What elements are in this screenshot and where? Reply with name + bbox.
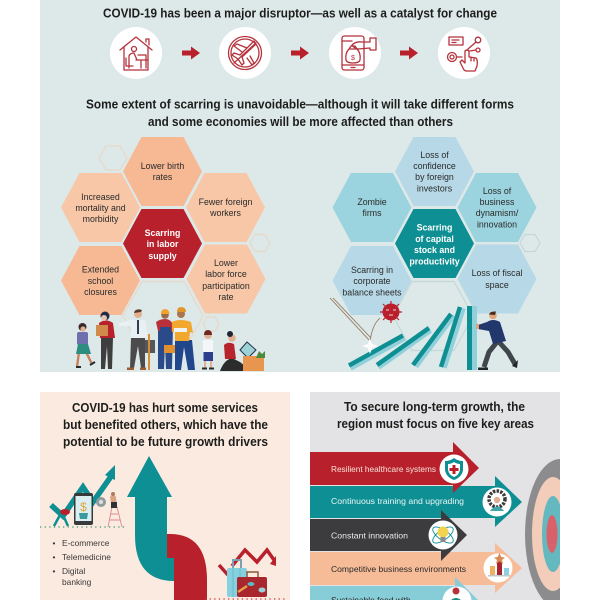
- figure: man pushing domino: [476, 311, 518, 370]
- figure: office worker: [119, 309, 155, 370]
- hexagon: scarring in labor supply: supply: [148, 251, 177, 261]
- hexagon: loss of confidence: Loss of: [420, 150, 449, 160]
- hexagon: scarring of capital stock: [395, 209, 474, 278]
- figure: seated woman with belongings: [220, 331, 265, 371]
- figure: construction worker: [172, 307, 195, 370]
- hexagon: lower birth rates: rates: [153, 172, 173, 182]
- illustration: travel decline: [205, 550, 285, 599]
- heading: services: potential to be future growth drivers: [63, 435, 268, 449]
- hexagon cluster: scarring in labor supply: [61, 137, 270, 350]
- list: growth services: Telemedicine: [62, 552, 111, 562]
- hexagon: lower birth rates: Lower birth: [141, 161, 184, 171]
- hexagon: loss of confidence: [395, 137, 474, 206]
- heading: services: COVID-19 has hurt some services: [72, 401, 258, 415]
- hexagon: lower participation: labor force: [205, 269, 247, 279]
- hexagon: loss of confidence: confidence: [413, 161, 456, 171]
- figure: girl: [76, 323, 95, 367]
- arrow: competitive environments: [310, 543, 522, 593]
- arrow: continuous training: [310, 476, 522, 527]
- arrow: red falling: [167, 534, 207, 600]
- hexagon: loss of fiscal space: [458, 244, 536, 314]
- icon: digital payment: $: [351, 55, 355, 62]
- list: growth services: [52, 538, 111, 587]
- hexagon: scarring in labor supply: in labor: [147, 239, 179, 249]
- hexagon: loss of dynamism: [458, 173, 536, 242]
- hexagon cluster: scarring of capital: [332, 137, 540, 350]
- hexagon: fewer foreign workers: workers: [209, 208, 241, 218]
- list: growth services: •: [52, 538, 56, 548]
- hexagon: scarring of capital stock: stock and: [414, 245, 455, 255]
- illustration: group of workers: [76, 307, 265, 371]
- heading: services: but benefited others, which have the: [63, 418, 268, 432]
- hexagon: zombie firms: Zombie: [357, 197, 387, 207]
- hexagon: extended school closures: closures: [84, 287, 117, 297]
- hexagon: lower participation: Lower: [214, 258, 238, 268]
- hexagon: increased mortality: Increased: [81, 192, 120, 202]
- heading: scarring is unavoidable: and some economies will be more affected than others: [148, 115, 453, 129]
- hexagon: increased mortality: mortality and: [75, 203, 126, 213]
- hexagon: scarring in corporate balance sheets: Scarring in: [351, 265, 393, 275]
- hexagon: increased mortality: [61, 173, 140, 242]
- arrow: competitive environments: Competitive business environments: [331, 564, 466, 574]
- hexagon: loss of fiscal space: Loss of fiscal: [472, 268, 522, 278]
- list: growth services: E-commerce: [62, 538, 110, 548]
- arrow: resilient healthcare: Resilient healthcare systems: [331, 464, 436, 474]
- hexagon: loss of dynamism: Loss of: [483, 186, 512, 196]
- list: growth services: Digital: [62, 566, 85, 576]
- icon: virus: [380, 301, 402, 323]
- panel: scarring overview: [40, 0, 560, 372]
- hexagon: fewer foreign workers: [186, 173, 265, 242]
- heading: services: [63, 401, 268, 449]
- hexagon: loss of dynamism: innovation: [477, 220, 517, 230]
- icon: target: [525, 455, 600, 600]
- arrow: step two: [291, 46, 309, 60]
- arrow: resilient healthcare: [310, 442, 479, 493]
- heading: scarring is unavoidable: Some extent of scarring is unavoidable—although it will take different forms: [86, 98, 514, 112]
- heading: scarring is unavoidable: [86, 98, 514, 129]
- illustration: digital growth: [40, 465, 125, 527]
- arrow: constant innovation: Constant innovation: [331, 530, 408, 540]
- panel: hurt and benefited services: [40, 392, 290, 600]
- hexagon: extended school closures: [61, 246, 140, 315]
- hexagon: lower birth rates: [123, 137, 202, 206]
- hexagon: loss of dynamism: business: [480, 197, 515, 207]
- arrow: sustainable food: [310, 577, 480, 600]
- arrow: step three: [400, 46, 418, 60]
- hexagon: scarring in corporate balance sheets: [332, 246, 412, 315]
- arrow: step one: [182, 46, 200, 60]
- heading: long-term growth: To secure long-term growth, the: [344, 400, 525, 414]
- icon: working from home: [110, 27, 162, 79]
- hexagon: loss of dynamism: dynamism/: [476, 208, 519, 218]
- icon: no air travel: [219, 27, 271, 79]
- arrow: continuous training: Continuous training and upgrading: [331, 496, 464, 506]
- arrow: teal rising: [127, 456, 174, 581]
- hexagon: scarring in labor supply: Scarring: [145, 228, 180, 238]
- hexagon: lower participation: participation: [202, 281, 250, 291]
- icon: digital transformation: [438, 27, 490, 79]
- hexagon: increased mortality: morbidity: [83, 214, 119, 224]
- hexagon: zombie firms: [332, 173, 412, 242]
- hexagon: extended school closures: Extended: [82, 264, 119, 274]
- list: growth services: •: [52, 552, 56, 562]
- hexagon: scarring in labor supply: [123, 209, 202, 278]
- figure: manual worker in overalls: [156, 309, 175, 369]
- hexagon: loss of confidence: investors: [417, 184, 453, 194]
- hexagon: scarring of capital stock: productivity: [409, 256, 460, 266]
- heading: long-term growth: [337, 400, 534, 431]
- illustration: digital growth: $: [80, 500, 87, 514]
- figure: schoolboy: [202, 330, 214, 368]
- hexagon: fewer foreign workers: Fewer foreign: [199, 197, 252, 207]
- hexagon: loss of confidence: by foreign: [415, 172, 454, 182]
- hexagon: zombie firms: firms: [362, 208, 382, 218]
- hexagon: extended school closures: school: [88, 276, 113, 286]
- hexagon: scarring of capital stock: of capital: [415, 234, 454, 244]
- illustration: falling dominoes: [330, 298, 518, 370]
- heading: disruptor and catalyst: COVID-19 has been a major disruptor—as well as a catalyst for change: [103, 6, 497, 20]
- arrow: constant innovation: [310, 510, 467, 561]
- hexagon: scarring in corporate balance sheets: balance sheets: [342, 288, 402, 298]
- icon: digital payment: [329, 27, 381, 79]
- heading: long-term growth: region must focus on five key areas: [337, 417, 534, 431]
- hexagon: scarring in corporate balance sheets: corporate: [353, 276, 391, 286]
- list: growth services: banking: [62, 577, 92, 587]
- panel: five key areas: [310, 392, 600, 600]
- list: growth services: •: [52, 566, 56, 576]
- figure: woman with box: [96, 312, 115, 369]
- hexagon: loss of fiscal space: space: [485, 280, 509, 290]
- hexagon: scarring of capital stock: Scarring: [417, 222, 452, 232]
- hexagon: lower participation: rate: [218, 292, 234, 302]
- hexagon: lower participation: [186, 244, 266, 314]
